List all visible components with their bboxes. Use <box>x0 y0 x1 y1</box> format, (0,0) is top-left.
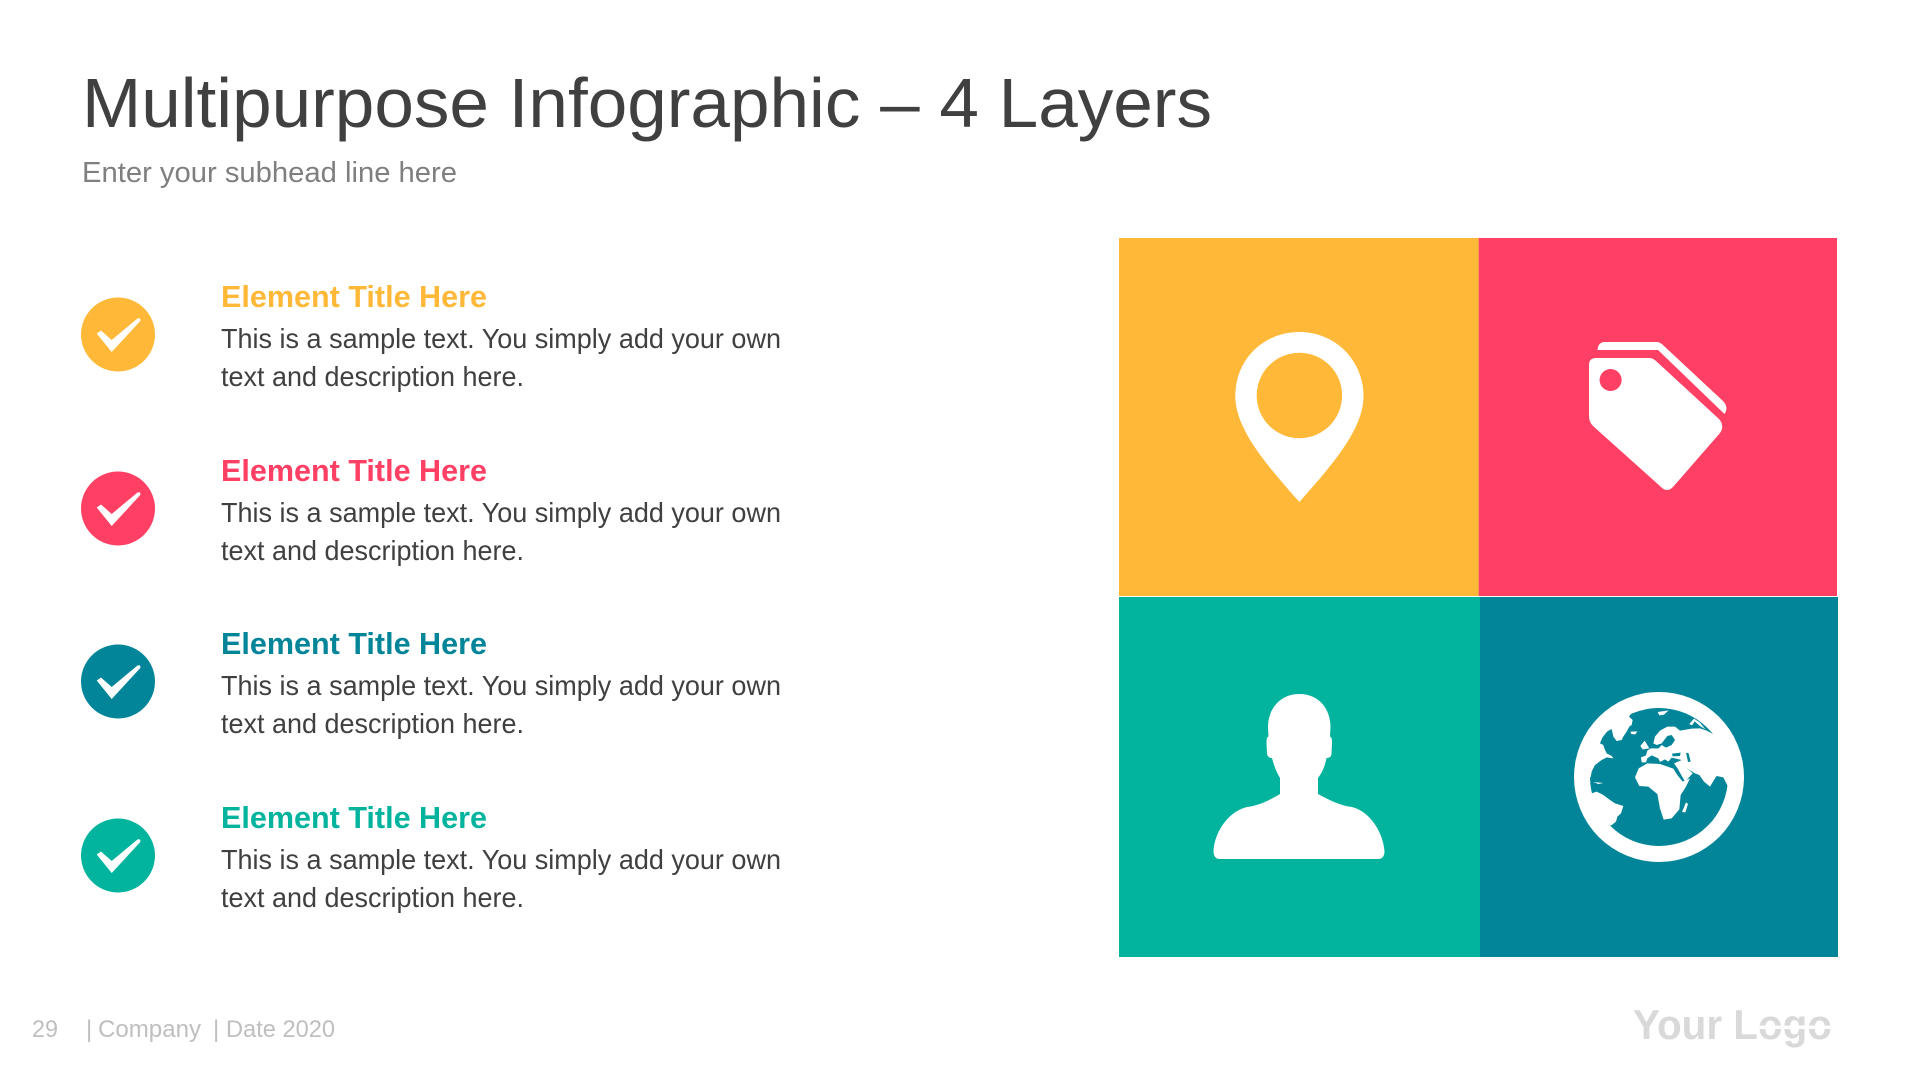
icon: green check badge <box>81 818 155 892</box>
item 2 text <box>221 497 781 566</box>
logo: Your Logo <box>1633 1001 1832 1048</box>
item 4 text: This is a sample text. You simply add your own <box>221 844 781 875</box>
item 4 heading: Element Title Here <box>221 801 487 835</box>
panel: globe (blue) <box>1480 597 1838 957</box>
subtitle: Enter your subhead line here <box>82 157 457 189</box>
footer: company and date: | <box>213 1016 219 1043</box>
list item 4 <box>81 801 781 913</box>
list item 3 <box>81 627 781 739</box>
panel: person (green) <box>1119 597 1480 957</box>
footer: company and date <box>86 1016 335 1043</box>
panel: location (yellow) <box>1119 238 1479 596</box>
panel: tag (red) <box>1479 238 1837 596</box>
footer: company and date: Company <box>98 1016 201 1043</box>
footer: company and date: | <box>86 1016 92 1043</box>
item 1 text: This is a sample text. You simply add your own <box>221 323 781 354</box>
footer: page number: 29 <box>32 1016 58 1043</box>
item 4 text: text and description here. <box>221 882 524 913</box>
item 2 text: text and description here. <box>221 535 524 566</box>
item 4 text <box>221 844 781 913</box>
icon: person bust <box>1214 694 1384 859</box>
icon: blue check badge <box>81 644 155 718</box>
item 2 text: This is a sample text. You simply add your own <box>221 497 781 528</box>
footer: company and date: Date 2020 <box>226 1016 335 1043</box>
list item 1 <box>81 280 781 392</box>
item 1 text <box>221 323 781 392</box>
icon: price tags <box>1589 342 1726 490</box>
title: Multipurpose Infographic – 4 Layers <box>82 64 1212 142</box>
icon: globe <box>1574 692 1744 862</box>
icon: yellow check badge <box>81 298 155 372</box>
icon: map pin <box>1235 332 1364 502</box>
list item 2 <box>81 454 781 566</box>
item 3 text: text and description here. <box>221 708 524 739</box>
item 3 text: This is a sample text. You simply add your own <box>221 670 781 701</box>
icon: red check badge <box>81 472 155 546</box>
item 1 text: text and description here. <box>221 361 524 392</box>
item 1 heading: Element Title Here <box>221 280 487 314</box>
item 3 text <box>221 670 781 739</box>
item 2 heading: Element Title Here <box>221 454 487 488</box>
item 3 heading: Element Title Here <box>221 627 487 661</box>
